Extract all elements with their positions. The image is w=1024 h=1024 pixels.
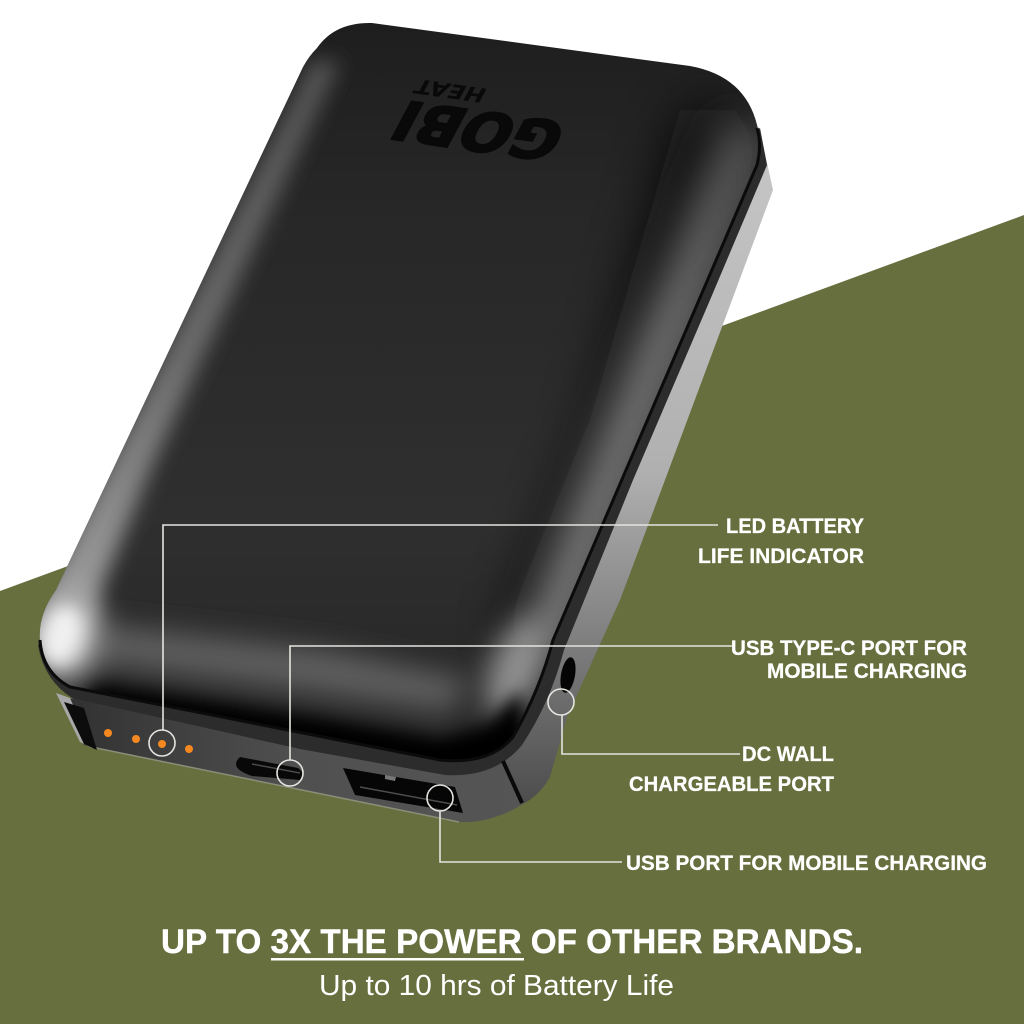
shell edge shadow line [40, 128, 760, 761]
callout: USB circle [427, 785, 453, 811]
icon: USB-C port [236, 757, 303, 780]
subheading: Up to 10 hrs of Battery Life [319, 970, 674, 1002]
callout: USB-C line [290, 646, 732, 760]
left front corner sliver [56, 693, 92, 748]
callout lines and circles [149, 525, 740, 862]
left front corner dark band [64, 702, 97, 750]
power bank front face [62, 695, 523, 822]
power bank top shell [40, 23, 760, 761]
label: USB Type-C port [731, 637, 967, 683]
shell highlights [19, 60, 775, 790]
callout: LED line [163, 525, 718, 730]
power bank right side wall [504, 140, 773, 804]
label: DC wall chargeable port: CHARGEABLE PORT [629, 773, 834, 796]
label: LED battery life indicator: LED BATTERY [726, 515, 864, 538]
logo: GOBI HEAT: HEAT [410, 75, 491, 106]
label: LED battery life indicator [698, 515, 864, 568]
headline: UP TO 3X THE POWER OF OTHER BRANDS. [161, 923, 863, 961]
label: LED battery life indicator: LIFE INDICATOR [698, 545, 864, 568]
front bottom edge highlight [96, 748, 459, 822]
label: USB Type-C port: USB TYPE-C PORT FOR [731, 637, 967, 660]
icon: USB port [343, 768, 463, 813]
callout: USB-C circle [277, 760, 303, 786]
callout: DC circle [548, 689, 574, 715]
label: DC wall chargeable port: DC WALL [742, 743, 834, 766]
olive background panel [0, 215, 1024, 1024]
dark rim [38, 128, 767, 775]
logo: GOBI HEAT: GOBI [381, 88, 576, 171]
callout: DC line [562, 715, 740, 754]
label: USB Type-C port: MOBILE CHARGING [767, 660, 967, 683]
callout: LED circle [149, 730, 175, 756]
product: power bank [19, 23, 775, 822]
label: DC wall chargeable port [629, 743, 834, 796]
label: USB port for mobile charging: USB PORT FOR MOBILE CHARGING [626, 852, 987, 875]
icon: LED indicators [104, 729, 193, 753]
right front corner divider [503, 761, 522, 803]
icon: DC port [558, 656, 578, 694]
callout: USB line [440, 811, 622, 862]
